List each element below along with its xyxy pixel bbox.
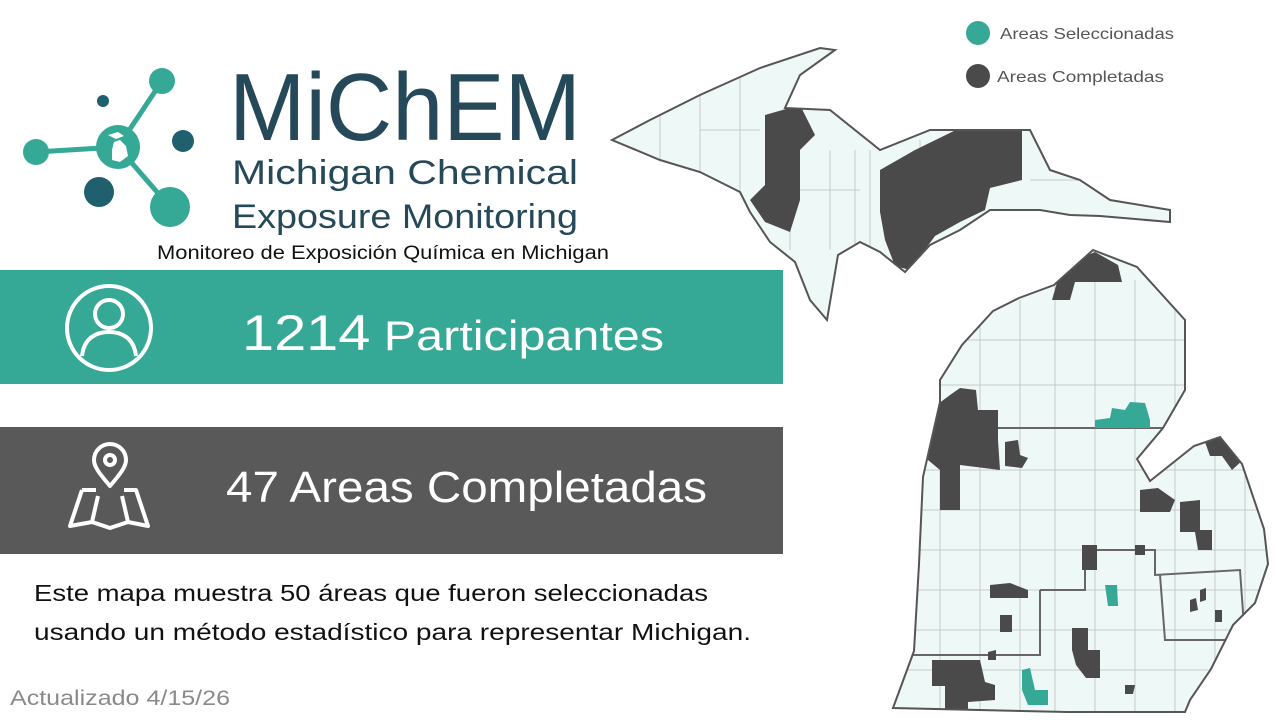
icon: person (67, 286, 151, 370)
subtitle english: Michigan Chemical (232, 154, 578, 192)
description text: usando un método estadístico para representar Michigan. (34, 619, 751, 645)
description text (34, 580, 751, 645)
icon: map pin (70, 444, 148, 528)
stat text: 47 Areas Completadas (226, 463, 707, 512)
upper peninsula (614, 49, 1169, 318)
title MiChEM: MiChEM (229, 54, 581, 161)
stat text: 1214 Participantes (242, 305, 664, 361)
map: Michigan (600, 40, 1280, 720)
lower peninsula (894, 252, 1267, 711)
logo: Exposure Monitoring (232, 198, 578, 236)
subtitle spanish: Monitoreo de Exposición Química en Michigan (157, 243, 609, 264)
molecule icon (23, 68, 194, 227)
description text: Este mapa muestra 50 áreas que fueron seleccionadas (34, 580, 708, 606)
legend (966, 21, 1174, 88)
panel: areas (0, 427, 783, 554)
legend: Areas Completadas (997, 69, 1164, 86)
panel: participants (0, 270, 783, 384)
logo (23, 54, 609, 264)
update date: Actualizado 4/15/26 (10, 687, 230, 710)
legend: Areas Seleccionadas (1000, 26, 1174, 43)
